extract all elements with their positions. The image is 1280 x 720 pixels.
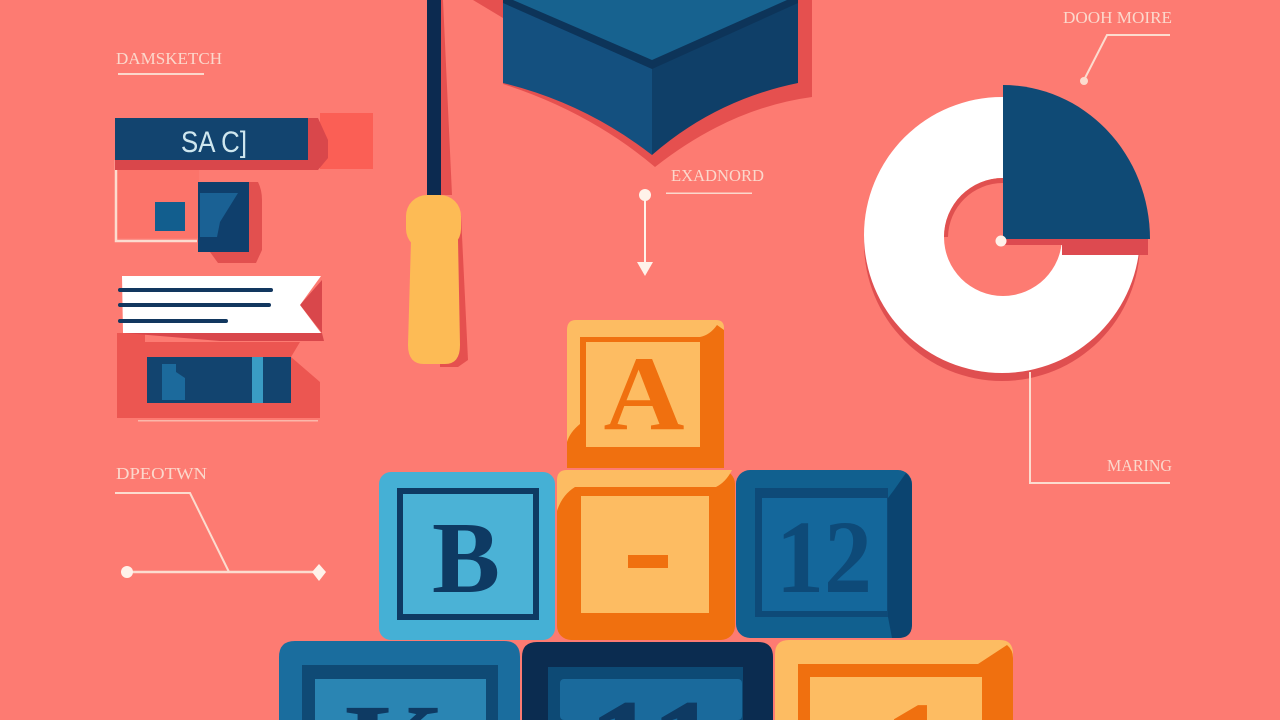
- block: dash: [557, 470, 735, 640]
- label: top left caption: DAMSKETCH: [116, 49, 222, 68]
- label: lower right caption: [1030, 372, 1172, 483]
- label: centre caption with arrow: [637, 166, 764, 276]
- label: top right caption: DOOH MOIRE: [1063, 8, 1172, 27]
- label: left lower caption with arrow: [115, 464, 326, 581]
- block: K: [279, 641, 520, 720]
- label: top right caption: [1063, 8, 1172, 85]
- block: B: B: [432, 502, 500, 615]
- block: 12: 12: [776, 500, 872, 615]
- block: 1: [775, 640, 1013, 720]
- panel: lower red card: [117, 333, 320, 422]
- block: A: A: [604, 335, 684, 452]
- panel: squares diagram: [116, 160, 262, 263]
- label: centre caption with arrow: EXADNORD: [671, 166, 764, 185]
- panel: title bar: SA C]: [181, 126, 247, 159]
- block: B: [379, 472, 555, 640]
- block: A: [567, 320, 724, 468]
- chart: donut with navy quarter: [864, 85, 1163, 381]
- block: 11: [522, 642, 773, 720]
- panel: ribbon with text lines: [118, 276, 324, 341]
- label: lower right caption: MARING: [1107, 456, 1172, 475]
- panel: title bar: [115, 113, 373, 170]
- label: left lower caption with arrow: DPEOTWN: [116, 464, 207, 483]
- block: 12: [736, 470, 912, 638]
- icon: tassel: [406, 0, 468, 367]
- icon: graduation cap: [473, 0, 812, 167]
